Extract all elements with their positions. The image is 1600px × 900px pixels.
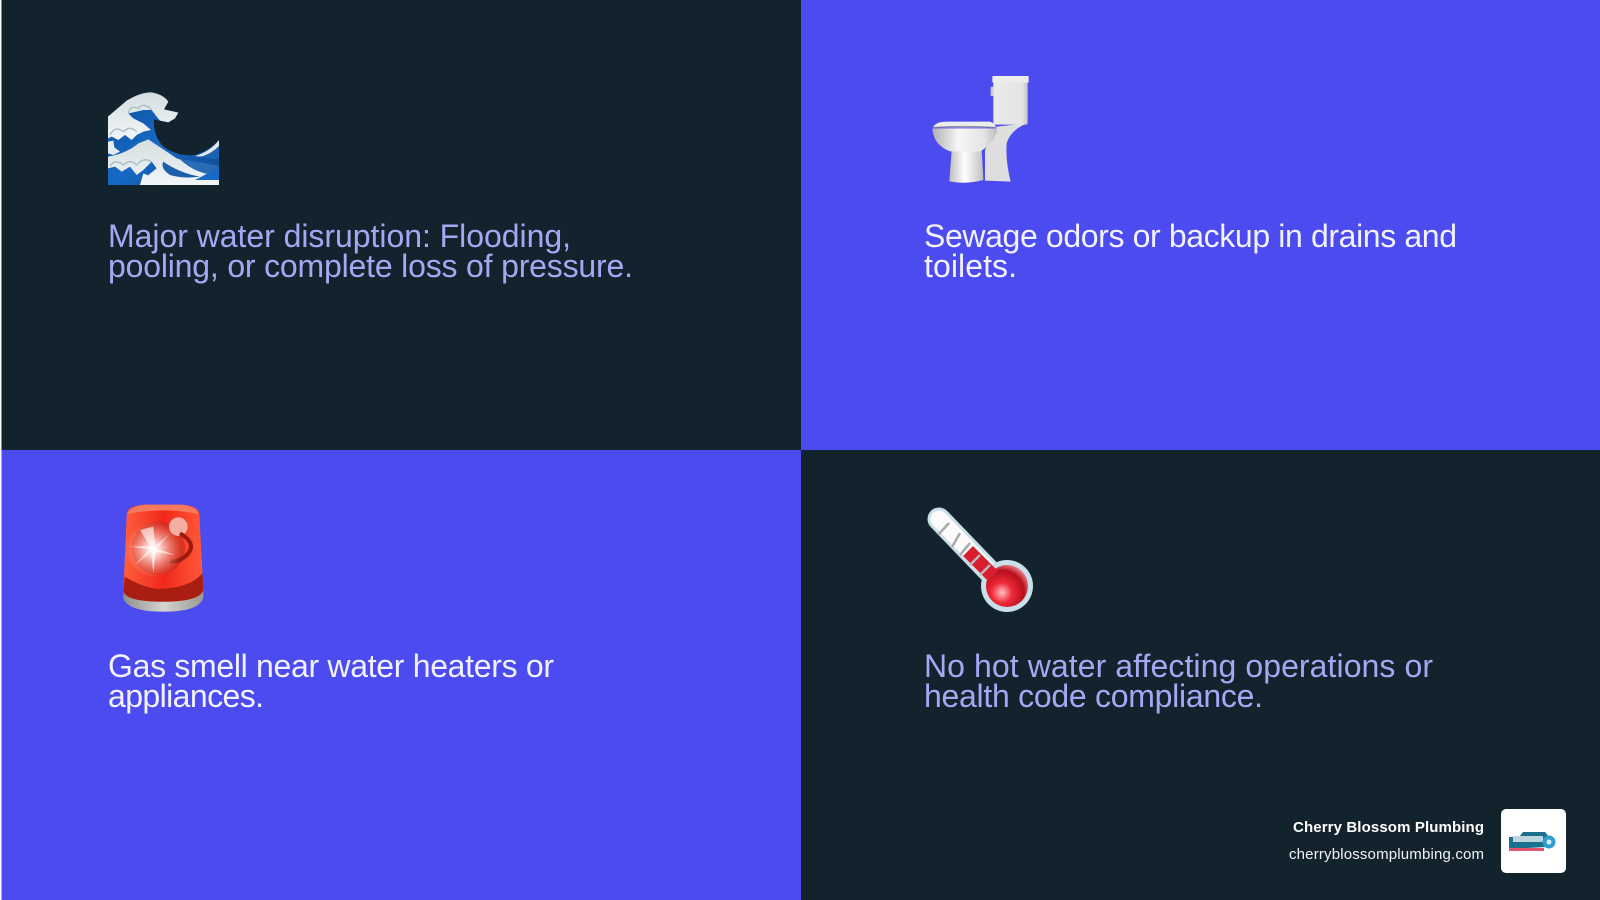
text: no hot water: health code compliance.: [924, 678, 1263, 714]
text: sewage odors: Sewage odors or backup in drains and: [924, 218, 1457, 254]
icon: red siren light: [123, 505, 203, 612]
panel: major water disruption: [2, 0, 801, 450]
text: major water disruption: pooling, or complete loss of pressure.: [108, 248, 633, 284]
text: major water disruption: Major water disruption: Flooding,: [108, 218, 571, 254]
icon: thermometer: [938, 519, 1033, 612]
brand name: Cherry Blossom Plumbing: [1293, 819, 1484, 836]
icon: toilet: [932, 76, 1029, 183]
text: no hot water: No hot water affecting operations or: [924, 648, 1433, 684]
text: gas smell: Gas smell near water heaters or: [108, 648, 554, 684]
footer: brand: [1289, 809, 1566, 873]
panel: sewage odors: [801, 0, 1600, 450]
text: gas smell: appliances.: [108, 678, 264, 714]
panel: gas smell: [2, 450, 801, 900]
text: sewage odors: toilets.: [924, 248, 1017, 284]
panel: no hot water: [801, 450, 1600, 900]
brand url: cherryblossomplumbing.com: [1289, 846, 1484, 863]
icon: water wave: [108, 92, 219, 185]
logo: [1501, 809, 1566, 873]
